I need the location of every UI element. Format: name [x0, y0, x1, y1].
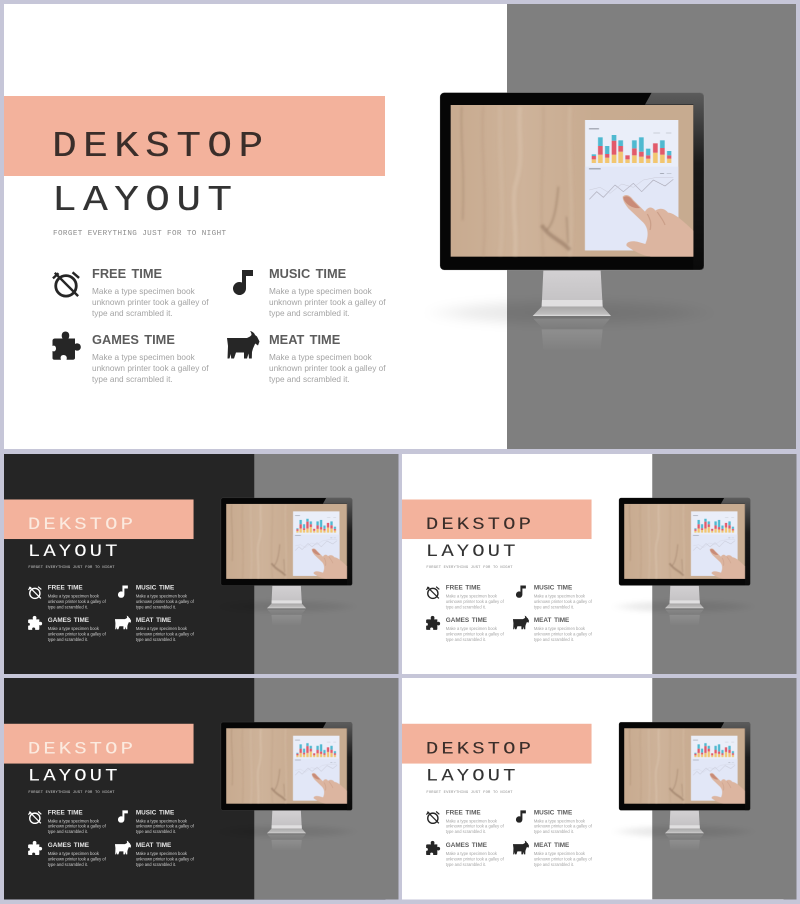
feature: free time: type and scrambled it. — [48, 605, 88, 609]
feature: games time: unknown printer took a galley of — [92, 364, 208, 372]
feature: music time: Make a type specimen book — [136, 594, 187, 598]
feature: meat time: type and scrambled it. — [534, 637, 574, 642]
feature: games time — [48, 616, 106, 642]
monitor mockup with chart photo — [618, 498, 750, 620]
icon: puzzle piece — [426, 616, 440, 630]
peach title band — [4, 96, 385, 176]
feature: meat time: MEAT TIME — [534, 841, 569, 848]
feature: music time — [269, 266, 386, 318]
feature: free time: Make a type specimen book — [446, 594, 497, 598]
feature: games time: unknown printer took a galley of — [446, 857, 504, 861]
feature: meat time: Make a type specimen book — [269, 352, 372, 362]
feature: music time: MUSIC TIME — [136, 583, 174, 591]
tagline: FORGET EVERYTHING JUST FOR TO NIGHT — [28, 566, 115, 570]
icon: goat — [513, 616, 530, 630]
feature: music time: unknown printer took a galley of — [534, 599, 592, 604]
peach title band — [4, 499, 194, 539]
feature: meat time: unknown printer took a galley of — [534, 632, 592, 636]
icon: alarm off — [52, 271, 80, 298]
icon: music note — [118, 810, 128, 823]
title: LAYOUT: LAYOUT — [28, 766, 121, 786]
feature: games time: Make a type specimen book — [446, 851, 497, 856]
feature: free time: type and scrambled it. — [48, 829, 88, 834]
feature: free time: Make a type specimen book — [48, 819, 99, 823]
feature: free time: FREE TIME — [92, 266, 162, 280]
icon: puzzle piece — [52, 332, 81, 360]
feature: music time: MUSIC TIME — [269, 266, 346, 280]
grey right panel — [254, 678, 398, 899]
feature: free time — [48, 583, 106, 610]
feature: games time: type and scrambled it. — [446, 637, 486, 642]
feature: meat time: MEAT TIME — [136, 841, 171, 848]
feature: music time: MUSIC TIME — [136, 808, 174, 816]
feature: meat time: type and scrambled it. — [136, 637, 176, 642]
feature: music time — [534, 583, 592, 610]
monitor mockup with chart photo — [220, 498, 352, 620]
title: LAYOUT: LAYOUT — [426, 766, 519, 786]
icon: puzzle piece — [426, 841, 440, 855]
title: LAYOUT: LAYOUT — [52, 180, 238, 221]
title: DEKSTOP: DEKSTOP — [28, 739, 136, 759]
slide: dark variant top left — [4, 454, 398, 674]
icon: goat — [115, 840, 132, 854]
icon: alarm off — [426, 811, 440, 824]
icon: music note — [516, 586, 526, 598]
icon: goat — [513, 841, 529, 855]
feature: free time: Make a type specimen book — [48, 594, 99, 598]
feature: music time: unknown printer took a galley of — [269, 298, 386, 306]
title: LAYOUT: LAYOUT — [426, 541, 519, 561]
feature: meat time: Make a type specimen book — [534, 851, 585, 856]
feature: meat time — [136, 616, 194, 642]
feature: free time: unknown printer took a galley of — [446, 599, 504, 604]
icon: puzzle piece — [28, 840, 42, 855]
feature: meat time: unknown printer took a galley of — [136, 857, 194, 861]
feature: free time: unknown printer took a galley of — [48, 824, 106, 828]
peach title band — [402, 499, 592, 539]
icon: goat — [115, 616, 132, 630]
feature: free time — [446, 583, 504, 610]
monitor mockup with chart photo — [402, 678, 796, 899]
icon: music note — [516, 810, 526, 823]
feature: free time: unknown printer took a galley of — [446, 824, 504, 828]
icon: goat — [227, 331, 260, 358]
peach title band — [402, 724, 592, 764]
feature: free time — [92, 266, 209, 318]
feature: music time: type and scrambled it. — [136, 605, 176, 609]
feature: games time — [446, 616, 504, 642]
feature: games time: GAMES TIME — [446, 616, 487, 623]
feature: games time: type and scrambled it. — [446, 862, 486, 867]
feature: free time: Make a type specimen book — [446, 819, 497, 823]
feature: meat time — [534, 841, 601, 867]
tagline: FORGET EVERYTHING JUST FOR TO NIGHT — [28, 790, 115, 794]
feature: meat time: Make a type specimen book — [136, 851, 187, 856]
feature: games time — [92, 332, 209, 384]
feature: games time: type and scrambled it. — [48, 862, 88, 867]
feature: music time — [136, 583, 194, 610]
feature: music time: MUSIC TIME — [534, 808, 572, 816]
feature: meat time: unknown printer took a galley of — [136, 632, 194, 636]
monitor mockup with chart photo — [440, 92, 704, 340]
title: DEKSTOP: DEKSTOP — [426, 514, 534, 535]
feature: music time — [534, 808, 592, 834]
feature: music time: unknown printer took a galley of — [534, 824, 592, 828]
feature: games time: unknown printer took a galley of — [48, 857, 106, 861]
feature: meat time: MEAT TIME — [269, 332, 340, 346]
peach title band — [4, 724, 194, 764]
feature: free time: Make a type specimen book — [92, 286, 195, 296]
title: DEKSTOP: DEKSTOP — [426, 739, 534, 759]
title: DEKSTOP: DEKSTOP — [28, 514, 136, 535]
feature: games time: type and scrambled it. — [48, 637, 88, 642]
feature: meat time — [136, 841, 194, 867]
feature: music time: Make a type specimen book — [534, 819, 585, 823]
feature: free time: FREE TIME — [446, 583, 481, 591]
grey right panel — [507, 4, 796, 449]
feature: free time: type and scrambled it. — [446, 829, 486, 834]
feature: music time: type and scrambled it. — [269, 308, 350, 318]
icon: alarm off — [426, 586, 440, 600]
feature: music time: unknown printer took a galley of — [136, 599, 194, 604]
grey right panel — [652, 454, 796, 674]
feature: meat time: unknown printer took a galley of — [269, 364, 386, 372]
feature: games time: type and scrambled it. — [92, 374, 173, 384]
tagline: FORGET EVERYTHING JUST FOR TO NIGHT — [426, 566, 513, 570]
feature: games time: Make a type specimen book — [92, 352, 195, 362]
feature: meat time — [534, 616, 592, 642]
icon: alarm off — [28, 811, 42, 824]
feature: music time — [136, 808, 194, 834]
feature: games time: Make a type specimen book — [48, 851, 99, 856]
feature: free time — [446, 808, 504, 834]
tagline: FORGET EVERYTHING JUST FOR TO NIGHT — [426, 790, 513, 794]
title: DEKSTOP: DEKSTOP — [52, 126, 269, 167]
feature: music time: Make a type specimen book — [269, 286, 372, 296]
feature: meat time: type and scrambled it. — [269, 374, 350, 384]
feature: games time: GAMES TIME — [48, 616, 89, 623]
feature: games time: unknown printer took a galley of — [48, 632, 106, 636]
feature: games time — [446, 841, 513, 867]
slide: white variant bottom right — [402, 678, 796, 899]
feature: music time: MUSIC TIME — [534, 583, 572, 591]
slide: dark variant bottom left — [4, 678, 398, 899]
monitor mockup with chart photo — [220, 722, 386, 900]
icon: puzzle piece — [28, 616, 42, 630]
feature: games time — [48, 841, 106, 867]
feature: games time: Make a type specimen book — [48, 626, 99, 631]
feature: music time: type and scrambled it. — [136, 829, 176, 834]
feature: games time: GAMES TIME — [48, 841, 89, 848]
feature: meat time: MEAT TIME — [136, 616, 171, 623]
feature: free time: unknown printer took a galley of — [92, 298, 208, 306]
slide: main white layout — [4, 4, 796, 449]
feature: music time: Make a type specimen book — [136, 819, 187, 823]
feature: free time: unknown printer took a galley of — [48, 599, 106, 604]
feature: music time: type and scrambled it. — [534, 605, 574, 609]
feature: free time: FREE TIME — [48, 808, 83, 816]
feature: meat time — [269, 332, 386, 384]
icon: music note — [233, 270, 253, 295]
feature: music time: Make a type specimen book — [534, 594, 585, 598]
tagline: FORGET EVERYTHING JUST FOR TO NIGHT — [53, 230, 226, 238]
feature: free time: FREE TIME — [446, 808, 481, 816]
feature: free time: FREE TIME — [48, 583, 83, 591]
feature: free time: type and scrambled it. — [446, 605, 486, 609]
grey right panel — [254, 454, 398, 674]
feature: free time: type and scrambled it. — [92, 308, 173, 318]
feature: meat time: Make a type specimen book — [136, 626, 187, 631]
feature: games time: GAMES TIME — [92, 332, 175, 346]
feature: meat time: unknown printer took a galley of — [534, 857, 592, 861]
feature: music time: unknown printer took a galley of — [136, 824, 194, 828]
icon: music note — [118, 586, 128, 598]
feature: games time: Make a type specimen book — [446, 626, 497, 631]
feature: games time: GAMES TIME — [446, 841, 487, 848]
feature: meat time: type and scrambled it. — [534, 862, 574, 867]
feature: games time: unknown printer took a galley of — [446, 632, 504, 636]
feature: free time — [48, 808, 106, 834]
title: LAYOUT: LAYOUT — [28, 541, 121, 561]
icon: alarm off — [28, 586, 42, 600]
feature: meat time: type and scrambled it. — [136, 862, 176, 867]
feature: meat time: MEAT TIME — [534, 616, 569, 623]
feature: music time: type and scrambled it. — [534, 829, 574, 834]
feature: meat time: Make a type specimen book — [534, 626, 585, 631]
slide: white variant top right — [402, 454, 796, 674]
grey right panel — [652, 678, 796, 899]
